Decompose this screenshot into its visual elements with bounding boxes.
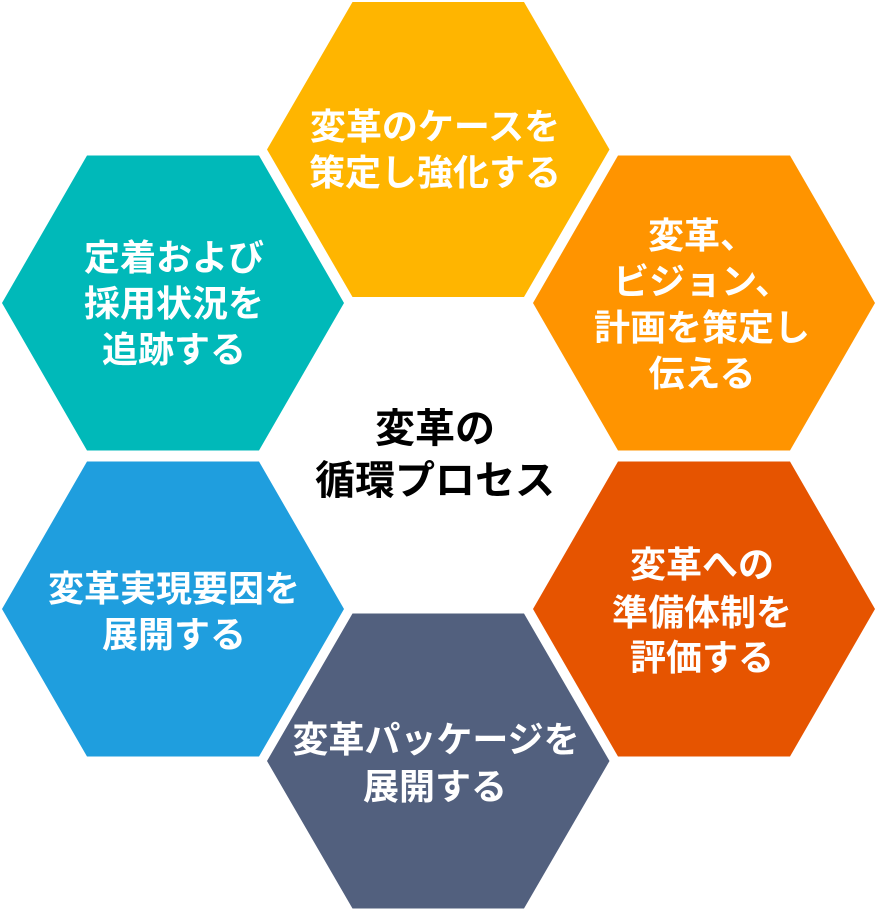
hexagon: deploy change package: 展開する <box>363 766 507 807</box>
hexagon: build the case for change: 策定し強化する <box>309 152 561 193</box>
hexagon: track adoption <box>2 156 344 450</box>
hexagon: assess readiness: 変革への <box>630 544 774 585</box>
hexagon: track adoption: 追跡する <box>102 329 246 370</box>
center title <box>315 407 555 503</box>
center title: 変革の <box>375 407 495 451</box>
hexagon: build the case for change: 変革のケースを <box>310 106 560 147</box>
hexagon: track adoption: 定着および <box>84 237 264 278</box>
center title: 循環プロセス <box>315 459 555 503</box>
hexagon: vision and plan: ビジョン、 <box>613 261 791 302</box>
hexagon: build the case for change <box>267 2 610 297</box>
hexagon: assess readiness <box>533 462 875 756</box>
hexagon: deploy enablers: 展開する <box>102 614 246 655</box>
hexagon: deploy change package: 変革パッケージを <box>292 719 580 760</box>
hexagon: deploy enablers: 変革実現要因を <box>48 568 300 609</box>
hexagon: vision and plan: 変革、 <box>648 215 756 256</box>
hexagon: deploy change package <box>267 614 610 908</box>
hexagon: track adoption: 採用状況を <box>84 283 264 324</box>
hexagon: vision and plan: 計画を策定し <box>594 307 810 348</box>
hexagon: assess readiness: 準備体制を <box>612 592 792 633</box>
hexagon: vision and plan: 伝える <box>649 353 755 394</box>
hexagon: deploy enablers <box>2 462 344 756</box>
hexagon: vision and plan <box>533 156 875 450</box>
hexagon: assess readiness: 評価する <box>630 637 774 678</box>
